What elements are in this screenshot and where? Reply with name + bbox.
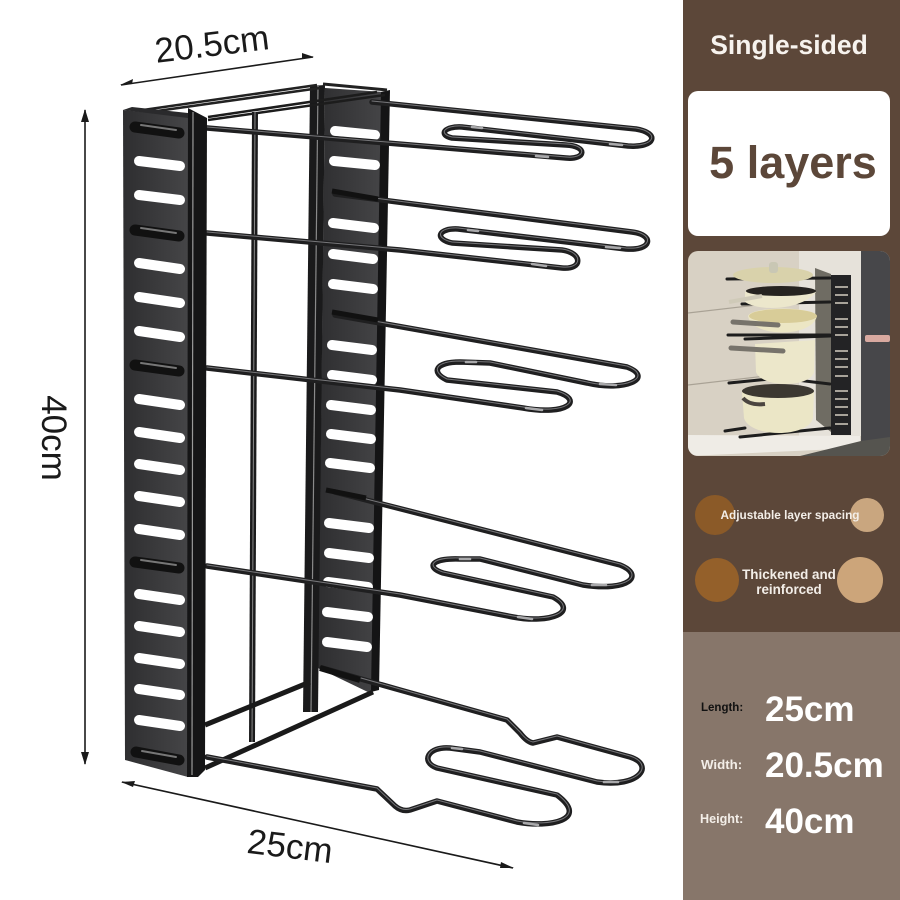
spec: height: 40cm <box>765 802 855 841</box>
slot brackets <box>135 125 179 760</box>
right column: brown background <box>683 0 900 900</box>
shelf wire 1 <box>207 101 652 158</box>
spec: length: 25cm <box>765 690 855 729</box>
product photo <box>688 251 890 456</box>
dimension: height 40cm: 40cm <box>34 395 73 481</box>
top rails <box>143 85 320 112</box>
spec: height <box>700 802 855 841</box>
dimension: height 40cm <box>34 109 89 765</box>
dimension: width 20.5cm <box>120 18 314 85</box>
spec: length <box>701 690 855 729</box>
base rails <box>205 682 310 725</box>
pots in photo <box>733 267 813 283</box>
dimension: width 20.5cm: 20.5cm <box>153 18 271 71</box>
spec: length: Length: <box>701 702 743 714</box>
rear shelf mounts <box>320 191 378 680</box>
feature: thickened and reinforced: Thickened and <box>742 567 836 582</box>
spec: width: Width: <box>701 757 742 772</box>
feature: thickened and reinforced: reinforced <box>756 582 822 597</box>
rack in photo <box>815 268 831 432</box>
panel slots <box>139 161 180 726</box>
shelf wire 2 <box>207 193 648 268</box>
rack: rear frame and right back panel <box>143 84 390 768</box>
spec: width: 20.5cm <box>765 746 884 785</box>
shelf wire 3 <box>207 314 638 410</box>
centre upright <box>252 112 255 742</box>
feature: adjustable layer spacing <box>695 495 884 535</box>
feature: thickened and reinforced <box>695 557 883 603</box>
spec: height: Height: <box>700 812 743 826</box>
dimension: length 25cm: 25cm <box>245 822 335 871</box>
card: 5 layers <box>688 91 890 236</box>
shelf wire 4 <box>207 491 632 619</box>
feature: adjustable layer spacing: Adjustable layer spacing <box>720 508 860 522</box>
spec: width <box>701 746 884 785</box>
rack: front left panel <box>123 107 207 777</box>
heading: Single-sided: Single-sided <box>710 30 868 60</box>
shelf wire 5 <box>207 667 642 825</box>
dimension: length 25cm <box>121 781 514 871</box>
card: 5 layers: 5 layers <box>709 137 877 188</box>
back panel <box>318 88 383 694</box>
